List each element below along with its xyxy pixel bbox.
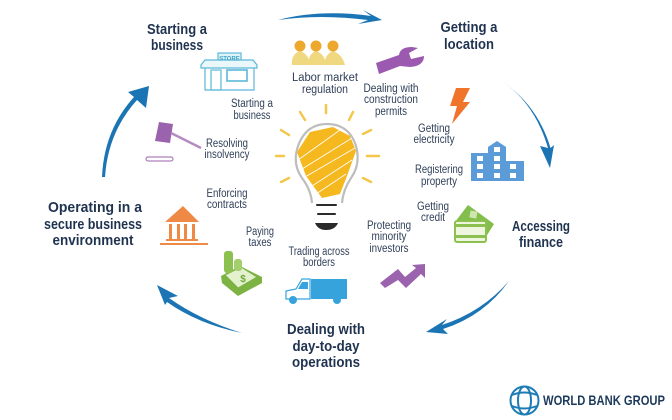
label: getting electricity	[414, 123, 455, 146]
heading: accessing finance: finance	[519, 234, 563, 251]
heading: starting a business	[147, 21, 208, 54]
bulb base	[315, 204, 338, 230]
label: resolving insolvency: Resolving	[206, 138, 248, 150]
icon: money and coins: $	[240, 274, 246, 285]
icon: rising zigzag arrow	[380, 264, 425, 288]
label: dealing with construction permits	[364, 83, 418, 118]
icon: building	[471, 141, 524, 181]
label: starting a business: business	[234, 110, 271, 122]
icon: gavel	[146, 122, 201, 161]
bulb outline	[296, 124, 358, 203]
label: protecting minority investors	[367, 220, 411, 255]
label: registering property: Registering	[415, 164, 463, 176]
heading: starting a business: Starting a	[147, 21, 208, 38]
arrow: day-to-day operations to secure environment	[157, 285, 242, 333]
logo: world bank group	[510, 386, 665, 414]
label: labor market regulation: regulation	[302, 84, 348, 96]
label: getting credit: credit	[421, 212, 446, 224]
heading: dealing with day-to-day operations: day-to-day	[292, 338, 360, 355]
heading: operating in a secure business environment	[44, 199, 143, 249]
label: starting a business	[231, 98, 274, 122]
icon: wrench	[376, 47, 424, 74]
heading: accessing finance: Accessing	[512, 218, 570, 235]
label: enforcing contracts	[206, 188, 248, 211]
label: dealing with construction permits: Dealing with	[364, 83, 418, 95]
heading: getting a location: location	[444, 36, 494, 53]
label: registering property	[415, 164, 463, 188]
label: dealing with construction permits: permits	[375, 106, 407, 118]
icon: courthouse	[160, 206, 208, 245]
label: paying taxes	[246, 226, 274, 249]
heading: operating in a secure business environment: secure business	[44, 216, 142, 233]
icon: truck	[286, 279, 347, 304]
label: getting electricity: electricity	[414, 134, 455, 146]
label: protecting minority investors: Protecting	[367, 220, 411, 232]
arrow: getting a location to accessing finance	[503, 82, 554, 168]
icon: light bulb	[276, 105, 379, 230]
label: trading across borders: borders	[303, 257, 335, 269]
arrow: accessing finance to day-to-day operations	[426, 281, 509, 334]
heading: accessing finance	[512, 218, 570, 251]
heading: operating in a secure business environment: environment	[52, 232, 134, 249]
heading: getting a location: Getting a	[440, 19, 498, 36]
label: trading across borders: Trading across	[288, 246, 350, 258]
label: protecting minority investors: investors	[370, 243, 409, 255]
arrow: secure environment to starting a business	[102, 86, 149, 177]
heading: dealing with day-to-day operations	[287, 321, 365, 371]
icon: credit cards	[455, 205, 494, 242]
label: enforcing contracts: contracts	[207, 199, 247, 211]
label: resolving insolvency: insolvency	[204, 149, 250, 161]
label: resolving insolvency	[204, 138, 250, 161]
heading: starting a business: business	[151, 37, 203, 54]
label: enforcing contracts: Enforcing	[206, 188, 248, 200]
icon: lightning bolt	[450, 88, 470, 124]
heading: dealing with day-to-day operations: Dealing with	[287, 321, 365, 338]
label: protecting minority investors: minority	[372, 231, 407, 243]
bulb scribble fill	[297, 127, 356, 198]
icon: money and coins	[221, 251, 262, 296]
heading: getting a location	[440, 19, 498, 53]
label: labor market regulation	[292, 72, 359, 96]
icon: store	[201, 53, 257, 90]
label: getting credit	[417, 201, 449, 224]
label: labor market regulation: Labor market	[292, 72, 359, 84]
label: starting a business: Starting a	[231, 98, 274, 110]
arrow: starting a business to getting a location	[278, 10, 382, 24]
label: paying taxes: taxes	[248, 237, 272, 249]
heading: dealing with day-to-day operations: operations	[292, 354, 360, 371]
heading: operating in a secure business environment: Operating in a	[48, 199, 143, 216]
label: getting electricity: Getting	[418, 123, 450, 135]
icon: workers	[292, 40, 345, 65]
label: trading across borders	[288, 246, 350, 269]
label: getting credit: Getting	[417, 201, 449, 213]
label: dealing with construction permits: construction	[364, 94, 418, 106]
bulb rays	[276, 105, 379, 182]
label: paying taxes: Paying	[246, 226, 274, 238]
icon: store: STORE	[219, 56, 240, 62]
label: registering property: property	[421, 176, 457, 188]
